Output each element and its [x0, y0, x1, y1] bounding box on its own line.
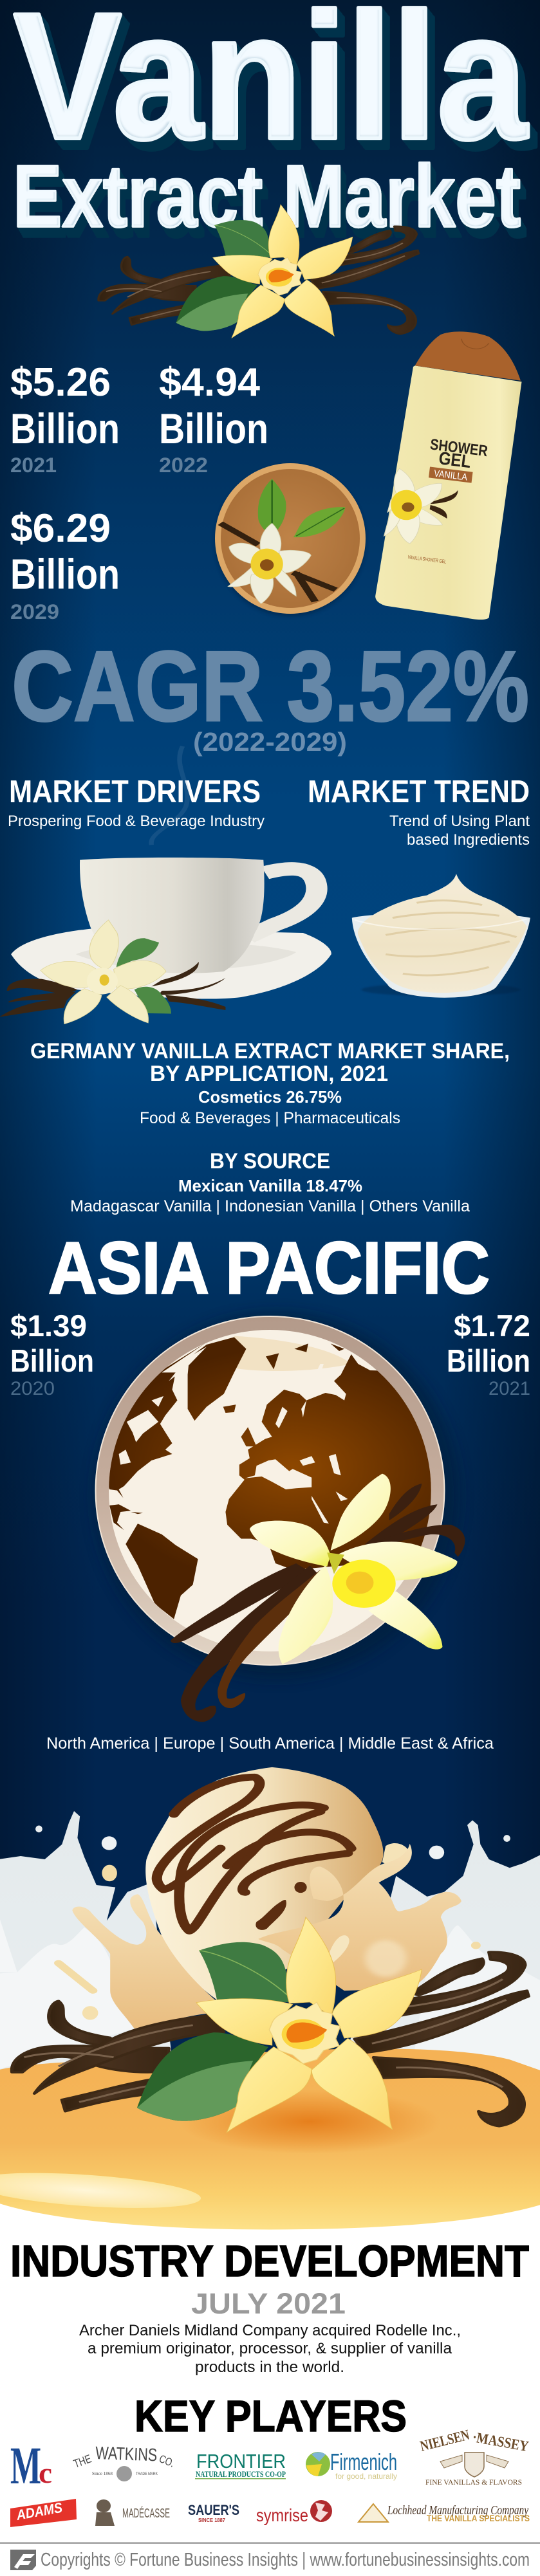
stat: 6.29 billion 2029: 2029	[10, 600, 59, 623]
chocolate drizzle	[157, 1777, 351, 1931]
region heading: Asia Pacific: ASIA PACIFIC	[48, 1228, 490, 1309]
market drivers: MARKET DRIVERS	[9, 775, 261, 809]
logo: Madecasse: MADÉCASSE	[122, 2506, 170, 2521]
logo: Symrise	[256, 2500, 332, 2525]
icon: Fortune Business Insights mark	[10, 2550, 36, 2570]
market trend: Trend of Using Plant	[389, 813, 530, 830]
market trend: based Ingredients	[407, 831, 530, 849]
ice cream scoop	[145, 1767, 384, 2002]
market drivers	[8, 775, 265, 830]
icon: cream dessert in glass bowl	[352, 874, 530, 998]
logo: The Watkins Co: Since 1868	[92, 2471, 113, 2476]
icon: shower gel bottle: VANILLA SHOWER GEL	[407, 554, 447, 565]
other regions list: North America | Europe | South America | Middle East & Africa	[46, 1734, 494, 1753]
icon: vanilla flower with beans (large)	[12, 1917, 528, 2133]
logo: The Watkins Co: THE	[72, 2452, 93, 2470]
logo: Nielsen-Massey: ·MASSEY	[471, 2429, 530, 2454]
development description: a premium originator, processor, & supplier of vanilla	[88, 2340, 452, 2357]
stat: Asia Pacific 2020: 2020	[10, 1378, 55, 1399]
heading: key players: KEY PLAYERS	[135, 2391, 407, 2441]
logo: Lochhead Manufacturing	[358, 2503, 530, 2523]
icon: vanilla flower with beans (top)	[98, 205, 419, 338]
development description: products in the world.	[195, 2359, 344, 2376]
logo: The Watkins Co: TRADE MARK	[136, 2472, 158, 2476]
stat: Asia Pacific 2020: $1.39	[10, 1309, 87, 1343]
logo: Firmenich: for good, naturally	[335, 2472, 397, 2481]
logo: The Watkins Co: CO.	[158, 2452, 176, 2470]
logo: Nielsen-Massey	[418, 2427, 530, 2487]
market share by application	[30, 1039, 510, 1127]
vanilla splash	[72, 1894, 220, 2029]
logo: Adams: ADAMS	[15, 2499, 64, 2523]
logo: Nielsen-Massey: FINE VANILLAS & FLAVORS	[425, 2478, 522, 2487]
stat: Asia Pacific 2020: Billion	[10, 1344, 94, 1379]
market share by application: Cosmetics 26.75%	[198, 1087, 342, 1107]
icon: wooden plate with vanilla flower	[215, 463, 366, 616]
stat: 6.29 billion 2029: $6.29	[10, 506, 111, 551]
logo: The Watkins Co	[72, 2443, 176, 2481]
logo: McCormick: M	[10, 2436, 41, 2495]
logo: McCormick: c	[39, 2456, 52, 2489]
stat: 4.94 billion 2022: Billion	[159, 405, 268, 452]
logo: Firmenich	[306, 2449, 397, 2481]
stat: Asia Pacific 2021: 2021	[489, 1378, 530, 1399]
stat: 4.94 billion 2022	[159, 360, 268, 477]
development description: Archer Daniels Midland Company acquired Rodelle Inc.,	[79, 2322, 461, 2339]
logo: Symrise: symrise	[256, 2505, 308, 2525]
logo: The Watkins Co: WATKINS	[95, 2443, 158, 2465]
stat: Asia Pacific 2020	[10, 1309, 94, 1399]
stat: 4.94 billion 2022: 2022	[159, 454, 208, 477]
market share by application: BY APPLICATION, 2021	[150, 1062, 388, 1086]
logo: Sauer's	[188, 2502, 239, 2523]
market share by application: GERMANY VANILLA EXTRACT MARKET SHARE,	[30, 1039, 510, 1063]
icon: shower gel bottle: GEL	[438, 448, 472, 472]
icon: coffee cup on saucer with vanilla flower	[0, 746, 331, 1024]
icon: globe with vanilla flower	[93, 1312, 465, 1722]
logo: Sauer's: SAUER'S	[188, 2502, 239, 2518]
stat: 6.29 billion 2029: Billion	[10, 550, 120, 598]
logo: Adams	[10, 2499, 77, 2527]
date: July 2021: JULY 2021	[191, 2287, 346, 2320]
stat: 5.26 billion 2021: Billion	[10, 405, 120, 452]
market drivers: Prospering Food & Beverage Industry	[8, 813, 265, 830]
icon: shower gel bottle	[375, 331, 522, 620]
stat: 5.26 billion 2021: 2021	[10, 454, 57, 477]
icon: shower gel bottle: VANILLA	[433, 468, 468, 483]
illustration: milk splash, ice cream and vanilla pool	[0, 1767, 540, 2289]
icon: shower gel bottle: SHOWER	[429, 436, 489, 460]
stat: 6.29 billion 2029	[10, 506, 120, 623]
market share by source: Mexican Vanilla 18.47%	[178, 1176, 362, 1195]
logo: Frontier	[195, 2450, 286, 2479]
vanilla pool	[0, 2048, 540, 2229]
logo: Madecasse	[95, 2499, 170, 2526]
stat: Asia Pacific 2021	[447, 1309, 530, 1399]
market share by source: BY SOURCE	[210, 1149, 330, 1173]
logo: Nielsen-Massey: NIELSEN	[418, 2427, 471, 2454]
stat: 5.26 billion 2021	[10, 360, 120, 477]
stat: 5.26 billion 2021: $5.26	[10, 360, 111, 405]
footer divider	[0, 2543, 540, 2544]
market share by source: Madagascar Vanilla | Indonesian Vanilla | Others Vanilla	[70, 1197, 470, 1215]
right milk splash	[344, 1820, 540, 2232]
stat: Asia Pacific 2021: $1.72	[454, 1309, 530, 1343]
logo: Frontier: FRONTIER	[196, 2450, 286, 2472]
market share by application: Food & Beverages | Pharmaceuticals	[140, 1109, 400, 1127]
market share by source	[70, 1149, 470, 1215]
left milk splash	[0, 1811, 172, 2232]
stat: 4.94 billion 2022: $4.94	[159, 360, 261, 405]
CAGR figure: (2022-2029)	[193, 727, 347, 757]
logo: Frontier: NATURAL PRODUCTS CO-OP	[196, 2469, 286, 2479]
logo: Sauer's: SINCE 1887	[198, 2517, 226, 2523]
development description	[79, 2322, 461, 2376]
market trend	[308, 775, 530, 849]
logo: Firmenich: Firmenich	[330, 2449, 397, 2475]
